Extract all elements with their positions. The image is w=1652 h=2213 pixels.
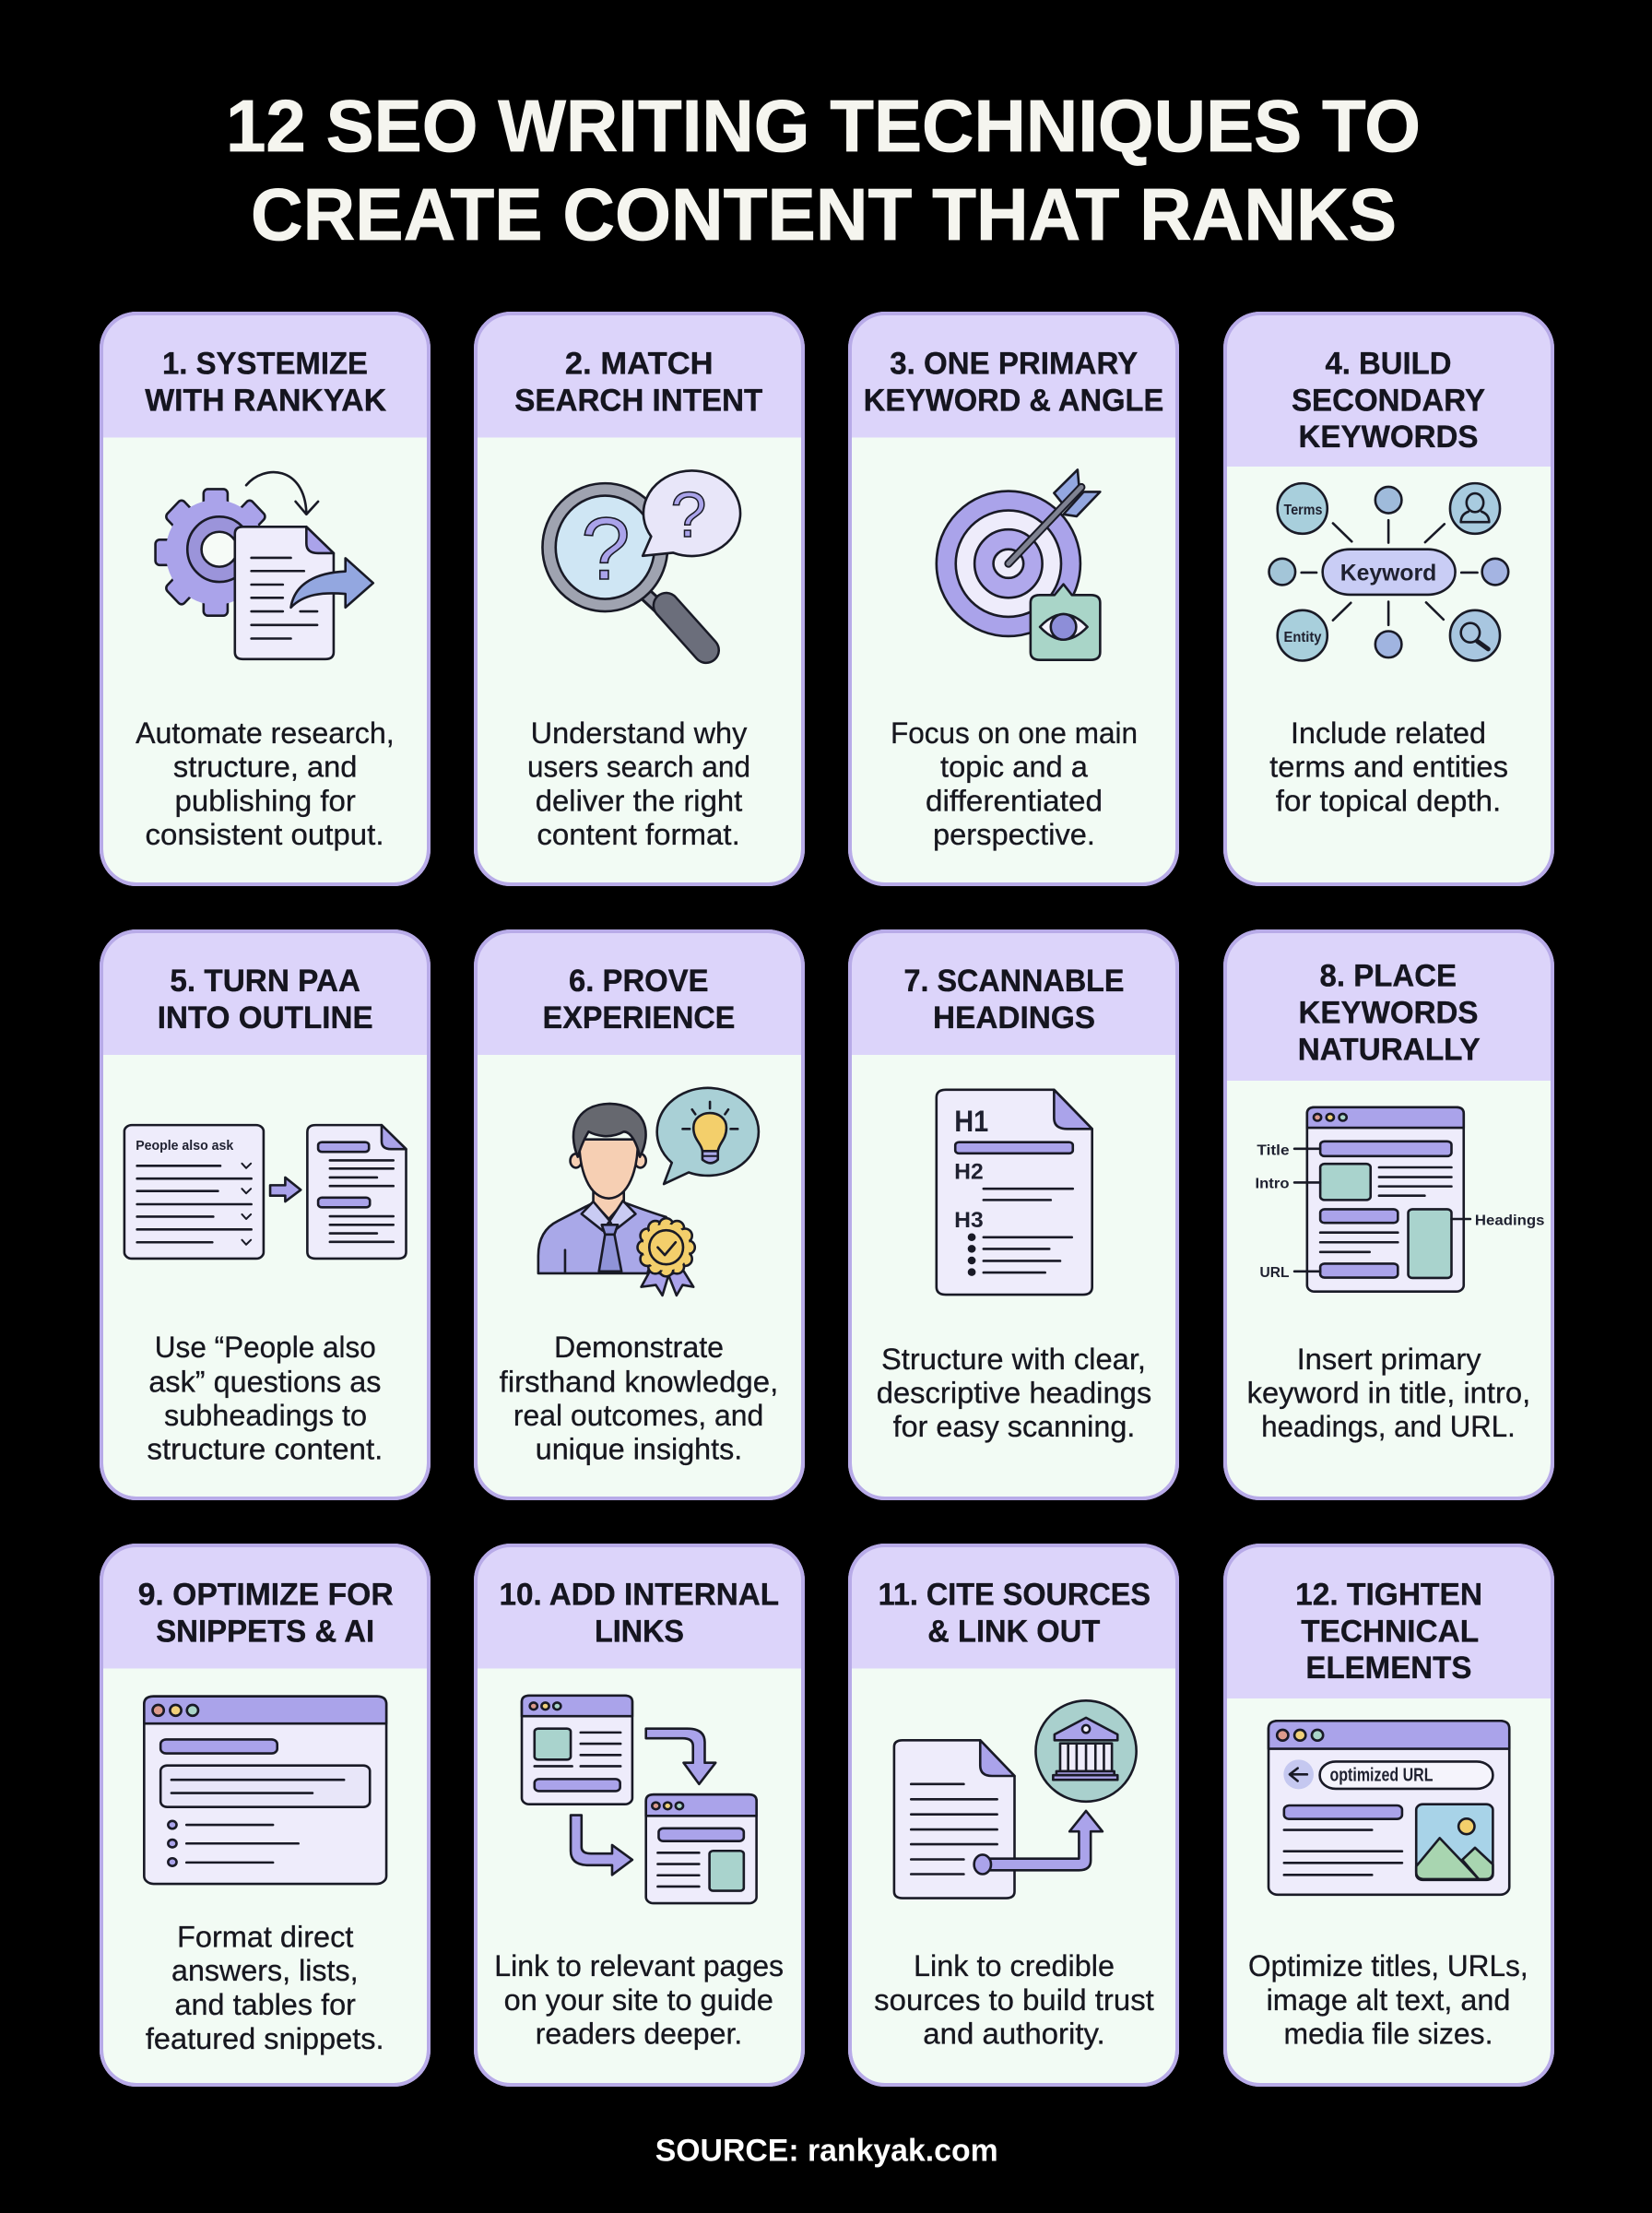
description: terms and entities (1269, 751, 1508, 784)
heading (1298, 958, 1481, 1067)
description: for topical depth. (1276, 784, 1501, 817)
heading: ELEMENTS (1305, 1651, 1471, 1686)
icon: target, arrow and eye (937, 469, 1100, 660)
description: image alt text, and (1267, 1983, 1510, 2017)
heading: 11. CITE SOURCES (879, 1577, 1150, 1612)
description (527, 716, 750, 851)
icon: page layout with keyword callouts: Headings (1475, 1213, 1545, 1229)
icon: magnifier with question marks: ? (581, 500, 631, 598)
heading: NATURALLY (1298, 1032, 1481, 1067)
description (1248, 1949, 1528, 2050)
icon: expert with lightbulb and badge (538, 1088, 759, 1296)
description: Optimize titles, URLs, (1248, 1949, 1528, 1982)
description: Link to credible (914, 1949, 1115, 1982)
heading: 10. ADD INTERNAL (500, 1577, 779, 1612)
heading: 2. MATCH (565, 346, 714, 381)
icon: page layout with keyword callouts (1256, 1107, 1545, 1292)
description: Structure with clear, (881, 1343, 1146, 1376)
panel: card 4 build secondary keywords (1225, 314, 1552, 884)
description: for easy scanning. (893, 1410, 1135, 1443)
icon: document with headings: H2 (954, 1160, 984, 1185)
panel: card 1 systemize with rankyak (101, 314, 429, 884)
icon: people also ask list to outline (124, 1125, 407, 1259)
description: structure, and (173, 751, 357, 784)
description: Use “People also (155, 1331, 376, 1364)
description: firsthand knowledge, (500, 1365, 778, 1398)
description: deliver the right (536, 784, 742, 817)
description: Understand why (531, 716, 747, 750)
description: keyword in title, intro, (1247, 1376, 1530, 1409)
panel: card 7 scannable headings (850, 931, 1177, 1498)
card background (850, 931, 1177, 1498)
heading (1295, 1577, 1482, 1686)
heading: TECHNICAL (1301, 1614, 1479, 1649)
card background (850, 314, 1177, 884)
description: on your site to guide (504, 1983, 773, 2017)
panel: card 10 add internal links (476, 1545, 803, 2085)
heading: 12. TIGHTEN (1295, 1577, 1482, 1612)
description (891, 716, 1138, 851)
icon: two linked pages with arrows (522, 1696, 757, 1903)
icon: page layout with keyword callouts: Title (1257, 1143, 1290, 1158)
heading: SNIPPETS & AI (156, 1614, 374, 1649)
card background (1225, 931, 1552, 1498)
panel: card 11 cite sources and link out (850, 1545, 1177, 2085)
description: ask” questions as (148, 1365, 381, 1398)
icon: keyword network: Entity (1283, 630, 1322, 645)
icon: page layout with keyword callouts: URL (1259, 1265, 1290, 1281)
heading: & LINK OUT (927, 1614, 1101, 1649)
description: perspective. (933, 818, 1095, 851)
card background (476, 1545, 803, 2085)
description (877, 1343, 1151, 1443)
icon: browser with optimized URL and image (1268, 1721, 1509, 1895)
description: real outcomes, and (513, 1399, 763, 1432)
heading: SEARCH INTENT (514, 383, 763, 418)
description: structure content. (147, 1433, 383, 1466)
description: Demonstrate (554, 1331, 724, 1364)
heading (543, 964, 735, 1035)
description: topic and a (940, 751, 1088, 784)
heading: WITH RANKYAK (145, 383, 387, 418)
icon: document linking to institution (894, 1700, 1137, 1899)
icon: browser with optimized URL and image: optimized URL (1329, 1765, 1433, 1785)
heading (1292, 346, 1485, 455)
panel: card 12 tighten technical elements (1225, 1545, 1552, 2085)
title (226, 85, 1421, 255)
heading: INTO OUTLINE (158, 1000, 373, 1035)
card background (476, 931, 803, 1498)
icon: people also ask list to outline: People also ask (136, 1138, 234, 1154)
description: and authority. (923, 2017, 1105, 2050)
description: consistent output. (146, 818, 384, 851)
card background (101, 1545, 429, 2085)
description: featured snippets. (146, 2022, 384, 2055)
source footer: SOURCE: rankyak.com (655, 2133, 998, 2168)
description: Insert primary (1297, 1343, 1481, 1376)
panel: card 6 prove experience (476, 931, 803, 1498)
heading: KEYWORD & ANGLE (864, 383, 1163, 418)
heading (514, 346, 763, 418)
description: headings, and URL. (1261, 1410, 1516, 1443)
description (1247, 1343, 1530, 1443)
icon: magnifier with question marks: ? (671, 479, 706, 550)
description: differentiated (926, 784, 1103, 817)
description (146, 1921, 384, 2055)
heading: HEADINGS (933, 1000, 1095, 1035)
description (500, 1331, 778, 1466)
heading: 3. ONE PRIMARY (890, 346, 1139, 381)
description: readers deeper. (536, 2017, 742, 2050)
icon: keyword network (1269, 483, 1508, 660)
description (494, 1949, 784, 2050)
heading (879, 1577, 1150, 1649)
heading: EXPERIENCE (543, 1000, 735, 1035)
heading: KEYWORDS (1298, 420, 1479, 455)
heading (500, 1577, 779, 1649)
description: Include related (1291, 716, 1486, 750)
title: 12 SEO WRITING TECHNIQUES TO (226, 85, 1421, 167)
description: sources to build trust (874, 1983, 1154, 2017)
heading (145, 346, 387, 418)
description: and tables for (175, 1988, 356, 2021)
card background (850, 1545, 1177, 2085)
icon: keyword network: Keyword (1340, 560, 1436, 586)
icon: document with headings: H3 (954, 1208, 984, 1233)
heading (138, 1577, 394, 1649)
description (136, 716, 395, 851)
icon: gear, document and arrow (156, 472, 373, 659)
panel: card 5 turn PAA into outline (101, 931, 429, 1498)
panel: card 3 one primary keyword and angle (850, 314, 1177, 884)
heading: SECONDARY (1292, 383, 1485, 418)
description (1269, 716, 1508, 817)
icon: document with headings (937, 1090, 1092, 1295)
description: content format. (537, 818, 740, 851)
description: unique insights. (536, 1433, 742, 1466)
heading: 6. PROVE (569, 964, 709, 999)
heading: 1. SYSTEMIZE (162, 346, 368, 381)
description: answers, lists, (171, 1954, 359, 1987)
panel: card 9 optimize for snippets and AI (101, 1545, 429, 2085)
heading (903, 964, 1125, 1035)
card background (101, 931, 429, 1498)
heading: 9. OPTIMIZE FOR (138, 1577, 394, 1612)
icon: browser with snippet (144, 1697, 386, 1884)
icon: keyword network: Terms (1283, 503, 1323, 518)
heading (864, 346, 1163, 418)
card background (476, 314, 803, 884)
description: Link to relevant pages (494, 1949, 784, 1982)
icon: page layout with keyword callouts: Intro (1256, 1177, 1290, 1192)
heading: 7. SCANNABLE (903, 964, 1125, 999)
description (147, 1331, 383, 1466)
card background (1225, 314, 1552, 884)
panel: card 8 place keywords naturally (1225, 931, 1552, 1498)
description: publishing for (175, 784, 356, 817)
description: Focus on one main (891, 716, 1138, 750)
description: Automate research, (136, 716, 395, 750)
heading: 4. BUILD (1326, 346, 1451, 381)
icon: magnifier with question marks (542, 470, 740, 650)
heading: LINKS (595, 1614, 684, 1649)
heading: 8. PLACE (1320, 958, 1457, 993)
card background (1225, 1545, 1552, 2085)
heading (158, 964, 373, 1035)
icon: document with headings: H1 (954, 1105, 988, 1138)
heading: KEYWORDS (1298, 995, 1479, 1030)
description: media file sizes. (1283, 2017, 1493, 2050)
description: subheadings to (164, 1399, 367, 1432)
description: descriptive headings (877, 1376, 1151, 1409)
panel: card 2 match search intent (476, 314, 803, 884)
heading: 5. TURN PAA (170, 964, 360, 999)
description (874, 1949, 1154, 2050)
description: users search and (527, 751, 750, 784)
description: Format direct (177, 1921, 353, 1954)
card background (101, 314, 429, 884)
title: CREATE CONTENT THAT RANKS (251, 173, 1397, 255)
